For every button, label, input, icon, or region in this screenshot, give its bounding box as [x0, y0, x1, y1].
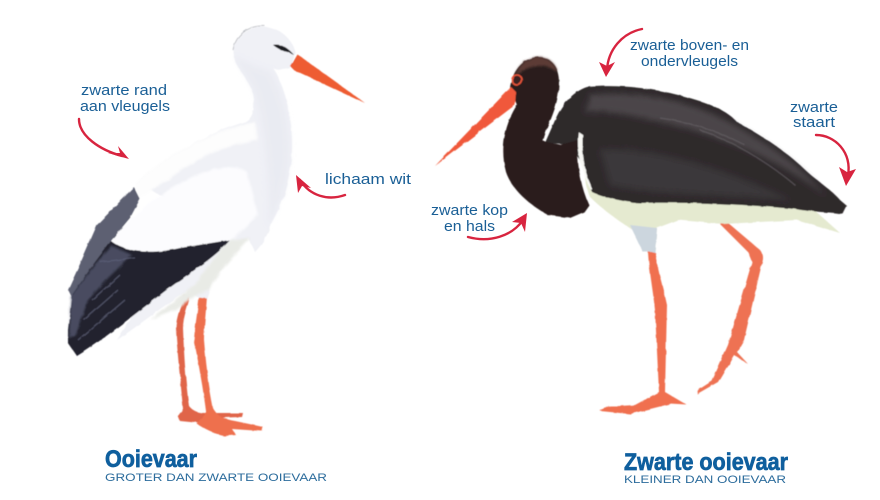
note: zwarte rand aan vleugels: aan vleugels [80, 99, 170, 115]
title: Zwarte ooievaar [624, 449, 788, 486]
black stork beak [435, 87, 516, 166]
arrow: to black neck [468, 213, 527, 239]
black stork back leg [697, 222, 763, 394]
white stork body [117, 27, 295, 340]
white stork black flight feathers [68, 240, 230, 356]
white stork beak [290, 54, 365, 103]
note: zwarte staart: zwarte [790, 100, 838, 116]
arrow: to tail [816, 135, 856, 186]
note: zwarte staart [790, 100, 838, 131]
black stork front leg [600, 252, 687, 414]
black stork wing sheen [585, 94, 825, 195]
title: Zwarte ooievaar: Zwarte ooievaar [624, 449, 788, 476]
note: zwarte boven- en ondervleugels: zwarte boven- en [630, 38, 749, 54]
white stork belly shade [150, 238, 250, 320]
note: zwarte rand aan vleugels [80, 83, 170, 115]
black stork illustration [435, 57, 847, 414]
note: lichaam wit: lichaam wit [325, 172, 411, 188]
title: Ooievaar [105, 446, 327, 484]
white stork grey wing feathers [68, 187, 140, 298]
white stork wing highlight [134, 122, 258, 198]
white stork front leg [194, 296, 263, 436]
note: zwarte staart: staart [793, 115, 835, 131]
note: zwarte kop en hals: en hals [444, 219, 495, 235]
title: Ooievaar: Ooievaar [105, 446, 197, 473]
arrow: to wing edge [79, 119, 129, 159]
black stork head and neck [503, 57, 589, 218]
white stork back leg [176, 295, 243, 423]
subtitle: larger: GROTER DAN ZWARTE OOIEVAAR [105, 472, 327, 484]
white stork illustration [68, 26, 365, 436]
white stork head outline [233, 26, 265, 50]
note: zwarte kop en hals: zwarte kop [431, 203, 508, 219]
black stork white flank stripe [579, 133, 592, 190]
note: zwarte boven- en ondervleugels [630, 38, 749, 70]
note: zwarte kop en hals [431, 203, 508, 235]
white stork eye [273, 45, 294, 55]
black stork pale belly [585, 170, 840, 252]
arrow: to white body [296, 175, 345, 197]
white stork feather strokes [69, 246, 132, 338]
black stork wing and body [545, 86, 847, 214]
note: zwarte boven- en ondervleugels: ondervleugels [641, 54, 738, 70]
arrow: to wings [599, 29, 642, 77]
note: zwarte rand aan vleugels: zwarte rand [81, 83, 167, 99]
subtitle: smaller: KLEINER DAN OOIEVAAR [624, 474, 786, 486]
white stork neck shade [234, 55, 290, 225]
black stork eye [512, 75, 522, 85]
